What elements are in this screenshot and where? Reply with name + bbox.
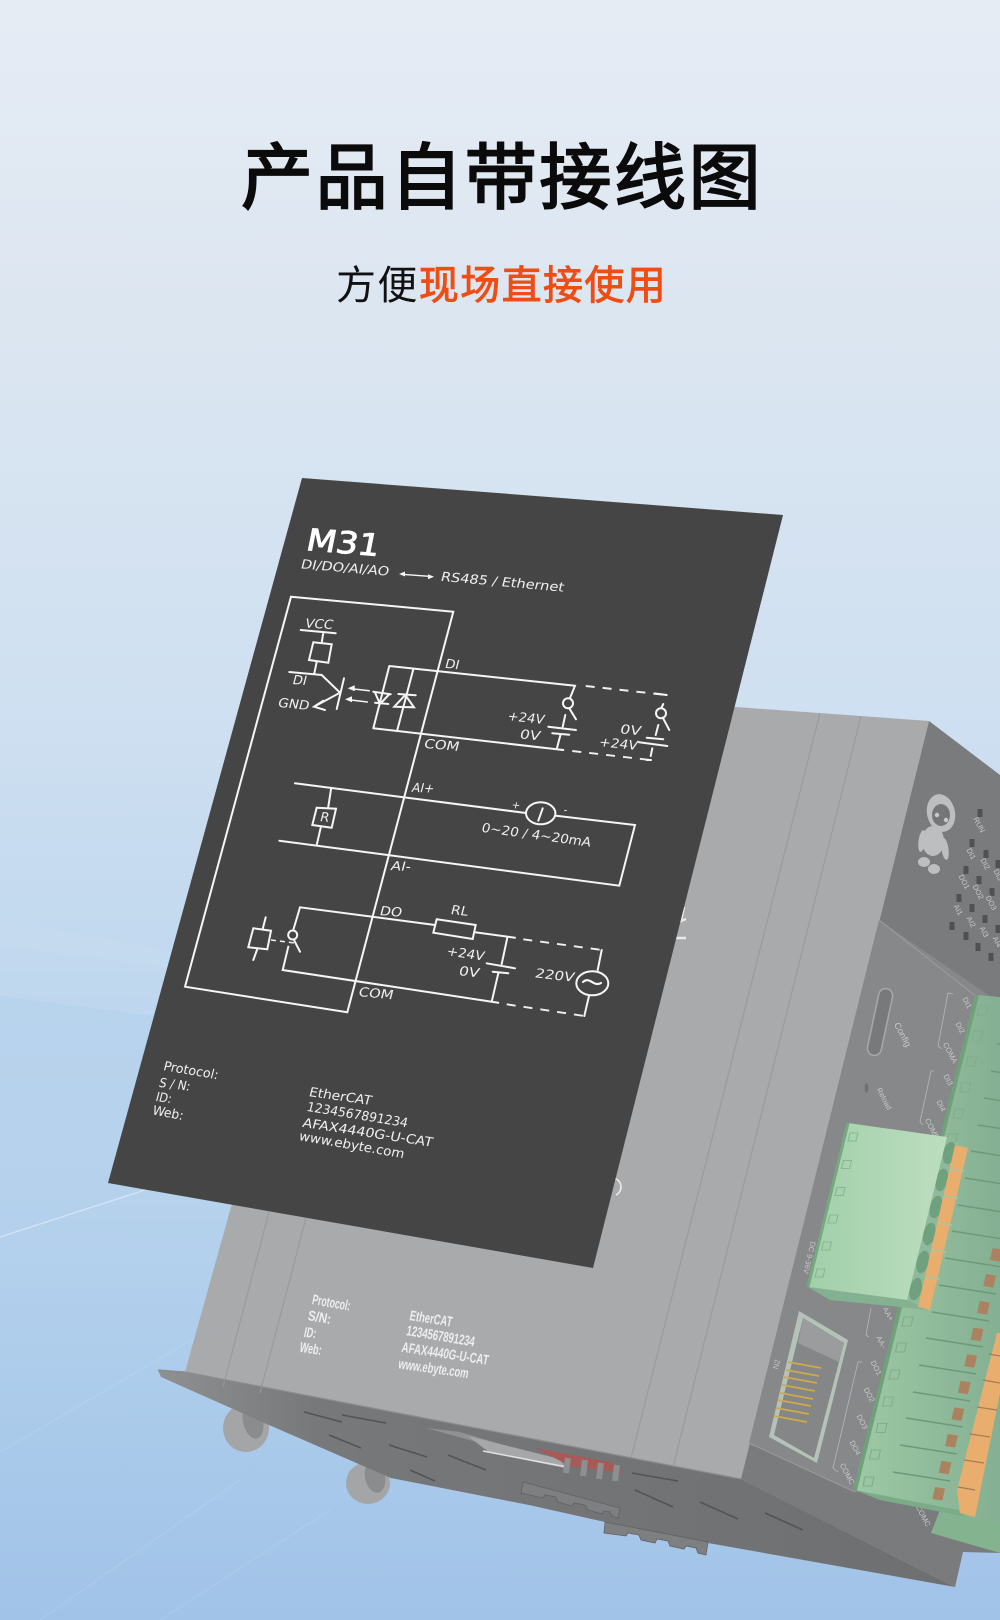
- digital output circuit: [248, 903, 608, 1016]
- status LED indicators: AI3: [978, 925, 991, 939]
- DIN rail combs: [521, 1482, 708, 1555]
- model heading: DI/DO/AI/AO: [299, 557, 391, 580]
- digital input circuit: [276, 616, 669, 760]
- terminal labels on side face: COMC: [838, 1462, 857, 1487]
- wire clamp ribs: [893, 1044, 1000, 1481]
- icon: robot mascot: [917, 792, 959, 874]
- product info text: Web:: [151, 1104, 185, 1124]
- side housing faces: [741, 721, 1000, 1587]
- terminal labels on side face: [771, 993, 974, 1529]
- terminal labels on side face: COMA: [941, 1041, 959, 1065]
- model heading: RS485 / Ethernet: [439, 570, 566, 596]
- module outline: [185, 597, 453, 1012]
- release slots: [932, 1248, 1000, 1500]
- terminal labels on side face: DO3: [855, 1413, 870, 1431]
- status LED indicators: DI2: [978, 857, 992, 871]
- product device: [158, 690, 1000, 1587]
- outlined latch squares: [863, 1006, 988, 1486]
- digital input circuit: VCC: [304, 616, 335, 632]
- terminal labels on side face: DI1: [960, 996, 974, 1010]
- analog input circuit: 0~20 / 4~20mA: [480, 821, 593, 851]
- panel: dark wiring diagram card: [108, 478, 783, 1268]
- hidden housing marks near card edge: [613, 907, 686, 1195]
- product info text: [151, 1059, 435, 1162]
- device underside: [158, 1370, 955, 1587]
- terminal labels on side face: Config: [892, 1021, 913, 1048]
- printed label on housing: Web:: [298, 1340, 323, 1359]
- main green terminal block: [855, 995, 1000, 1522]
- status LED indicators: DI1: [964, 847, 978, 861]
- product info text: Protocol:: [162, 1059, 220, 1083]
- product info text: 1234567891234: [305, 1100, 409, 1131]
- analog input circuit: R: [318, 810, 331, 826]
- RJ45 Ethernet port: [769, 1311, 848, 1463]
- printed label on housing: EtherCAT: [408, 1308, 454, 1331]
- terminal labels on side face: DC 9-36V: [801, 1241, 818, 1275]
- digital input circuit: +24V: [597, 735, 640, 754]
- terminal labels on side face: AA+: [881, 1305, 896, 1323]
- printed label on housing: www.ebyte.com: [396, 1356, 470, 1382]
- product info text: AFAX4440G-U-CAT: [301, 1116, 435, 1151]
- model heading: [299, 523, 566, 596]
- digital input circuit: DI: [443, 657, 461, 673]
- lower right terminal block: [931, 1510, 1000, 1553]
- analog input circuit: -: [562, 805, 569, 816]
- product info text: EtherCAT: [307, 1085, 374, 1109]
- title: 产品自带接线图: [241, 139, 763, 219]
- terminal labels on side face: DO1: [869, 1359, 884, 1377]
- status LED indicators: DO1: [957, 873, 972, 891]
- digital output circuit: RL: [449, 903, 471, 920]
- digital input circuit: COM: [422, 737, 461, 755]
- analog input circuit: +: [510, 800, 521, 812]
- status LED indicators: AI1: [952, 903, 965, 917]
- terminal labels on side face: COMC: [914, 1504, 933, 1529]
- digital input circuit: 0V: [518, 728, 542, 744]
- terminal labels on side face: DO2: [862, 1386, 877, 1404]
- status LED indicators: AI2: [965, 915, 978, 929]
- front housing face: [158, 690, 929, 1479]
- analog input circuit: [279, 780, 635, 886]
- product info text: www.ebyte.com: [297, 1129, 406, 1162]
- printed label on housing: AFAX4440G-U-CAT: [400, 1340, 490, 1369]
- printed label on housing: ID:: [303, 1325, 318, 1342]
- digital output circuit: +24V: [445, 944, 486, 965]
- digital output circuit: COM: [357, 985, 395, 1003]
- printed label on housing: [298, 1292, 490, 1382]
- terminal labels on side face: DI4: [934, 1099, 948, 1113]
- digital output circuit: 220V: [533, 967, 576, 986]
- mounting clips: [223, 1401, 390, 1504]
- product info text: S / N:: [157, 1076, 192, 1095]
- status LED indicators: [952, 809, 1000, 961]
- digital input circuit: 0V: [618, 723, 643, 739]
- status LED indicators: RUN: [971, 816, 987, 834]
- terminal labels on side face: DI3: [941, 1073, 955, 1087]
- USB config port: [864, 987, 894, 1093]
- terminal labels on side face: DI2: [953, 1021, 967, 1035]
- analog input circuit: AI+: [410, 780, 436, 796]
- printed label on housing: 1234567891234: [405, 1323, 476, 1351]
- orange wire clamps: [957, 1333, 1000, 1517]
- digital input circuit: GND: [276, 696, 311, 714]
- terminal labels on side face: COMB: [923, 1117, 941, 1141]
- digital input circuit: DI: [291, 672, 309, 688]
- status LED indicators: DO2: [971, 883, 986, 901]
- terminal labels on side face: N2: [771, 1359, 782, 1370]
- terminal labels on side face: DO4: [848, 1439, 863, 1457]
- plugged green connector: [808, 1123, 968, 1310]
- digital output circuit: DO: [378, 903, 404, 920]
- subtitle: 方便现场直接使用: [336, 264, 667, 308]
- terminal labels on side face: Reload: [875, 1086, 894, 1111]
- terminal labels on side face: AA-: [874, 1334, 888, 1350]
- digital output circuit: 0V: [457, 964, 481, 981]
- printed label on housing: S/N:: [306, 1308, 332, 1328]
- analog input circuit: AI-: [389, 858, 413, 874]
- model heading: M31: [303, 523, 383, 564]
- digital input circuit: +24V: [506, 709, 546, 728]
- product info text: ID:: [154, 1090, 173, 1107]
- status LED indicators: DO3: [984, 894, 999, 912]
- printed label on housing: Protocol:: [311, 1292, 352, 1315]
